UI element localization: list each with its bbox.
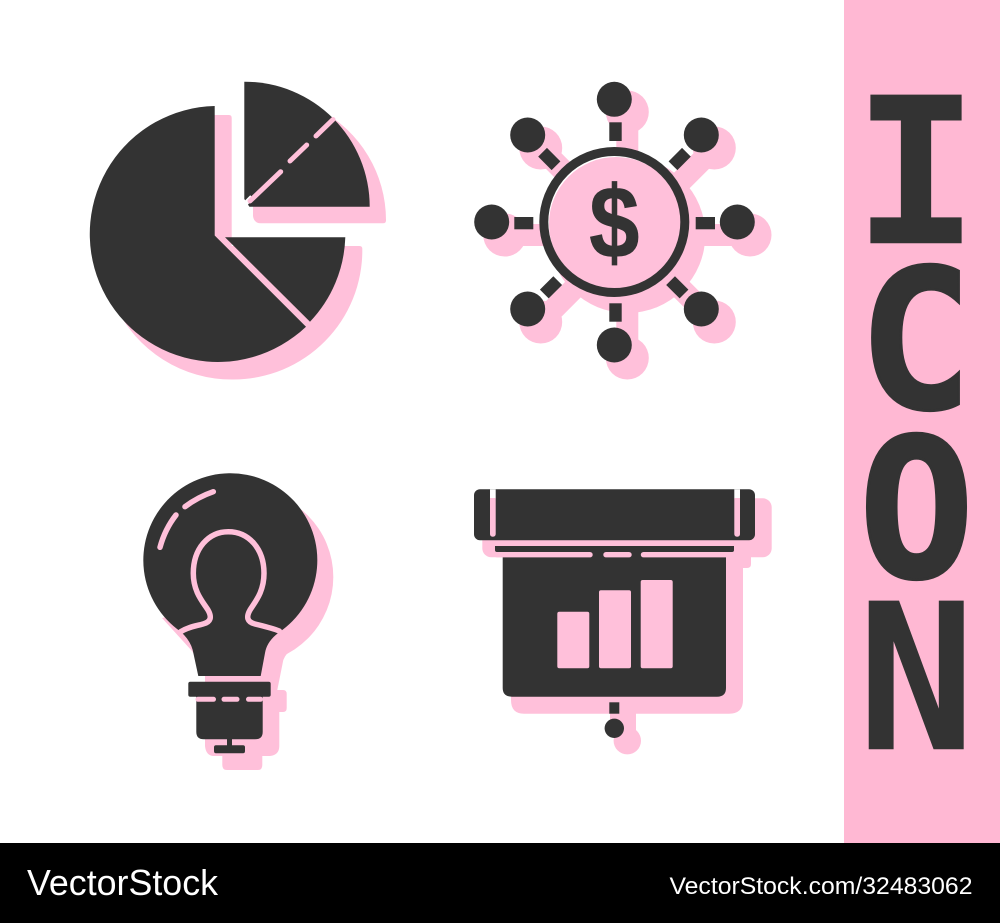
letter N: N <box>857 561 975 798</box>
bar chart <box>557 580 673 668</box>
collar dashes <box>198 697 260 702</box>
roller slits <box>490 489 740 537</box>
side panel: ICON <box>844 0 1000 843</box>
bulb tip <box>214 739 245 753</box>
coin ring <box>544 152 685 292</box>
letter O: O <box>859 398 974 623</box>
stand <box>605 702 624 738</box>
bulb base <box>196 696 263 739</box>
footer brand: VectorStock <box>27 862 219 903</box>
connector spokes <box>514 122 715 322</box>
icon: presentation board <box>474 489 772 754</box>
glass highlight <box>160 492 213 547</box>
filament <box>181 532 279 632</box>
letter I: I <box>853 54 979 292</box>
bulb glass and neck <box>143 473 317 676</box>
screen dashes <box>497 552 728 557</box>
network shadow <box>483 90 772 380</box>
letter C: C <box>858 229 973 454</box>
icon: dollar network <box>474 82 772 380</box>
screen <box>495 546 734 697</box>
bulb shadow <box>159 490 333 770</box>
board shadow <box>482 498 772 754</box>
roller bar <box>474 489 755 540</box>
footer image id: VectorStock.com/32483062 <box>670 873 972 900</box>
bulb collar <box>188 682 271 697</box>
network nodes <box>474 82 755 363</box>
icon: pie chart <box>90 82 386 380</box>
icon: light bulb <box>143 473 333 770</box>
dollar sign: $ <box>589 166 639 280</box>
footer bar <box>0 843 1000 923</box>
